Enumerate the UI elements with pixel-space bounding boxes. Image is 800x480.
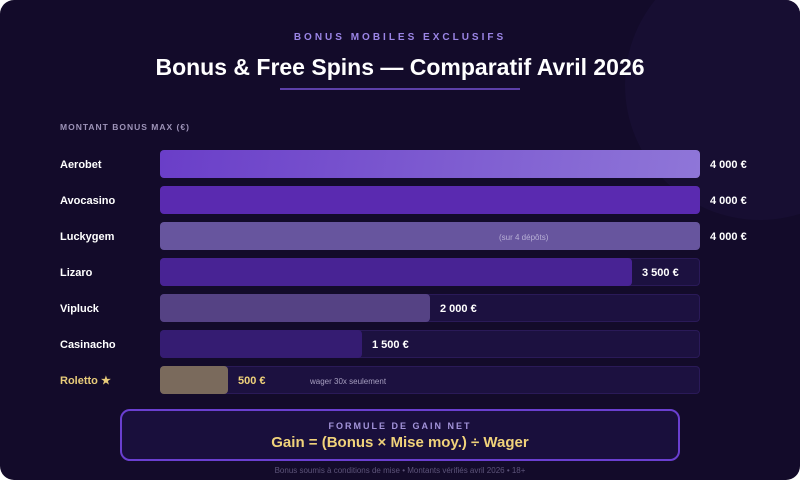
row: Lizaro — [60, 258, 700, 286]
footer: Bonus soumis à conditions de mise • Montants vérifiés avril 2026 • 18+ — [275, 466, 525, 475]
axis label: MONTANT BONUS MAX (€) — [60, 122, 190, 132]
row: Luckygem — [60, 222, 747, 250]
bar chart: Casinacho — [60, 339, 116, 351]
bar chart: Luckygem — [60, 231, 114, 243]
bar chart: 2 000 € — [440, 303, 477, 315]
bar chart: Avocasino — [60, 195, 115, 207]
bar chart: Roletto ★ — [60, 375, 111, 387]
bar chart: Lizaro — [60, 267, 92, 279]
formula box: Gain = (Bonus × Mise moy.) ÷ Wager — [271, 434, 529, 451]
bar chart: Vipluck — [60, 303, 99, 315]
subtitle: BONUS MOBILES EXCLUSIFS — [294, 32, 506, 43]
bar chart: 4 000 € — [710, 195, 747, 207]
bar chart: 500 € — [238, 375, 266, 387]
row: Roletto — [60, 366, 700, 394]
bar chart: wager 30x seulement — [310, 377, 386, 386]
row: Avocasino — [60, 186, 747, 214]
bar chart: 4 000 € — [710, 231, 747, 243]
bar chart: 1 500 € — [372, 339, 409, 351]
bar chart: Aerobet — [60, 159, 102, 171]
bar chart: (sur 4 dépôts) — [499, 233, 548, 242]
row: Vipluck — [60, 294, 700, 322]
title: Bonus & Free Spins — Comparatif Avril 2026 — [155, 54, 645, 80]
bar chart: 4 000 € — [710, 159, 747, 171]
row: Casinacho — [60, 330, 700, 358]
row: Aerobet — [60, 150, 747, 178]
formula box: FORMULE DE GAIN NET — [328, 421, 472, 431]
bar chart: 3 500 € — [642, 267, 679, 279]
formula box — [120, 409, 680, 461]
